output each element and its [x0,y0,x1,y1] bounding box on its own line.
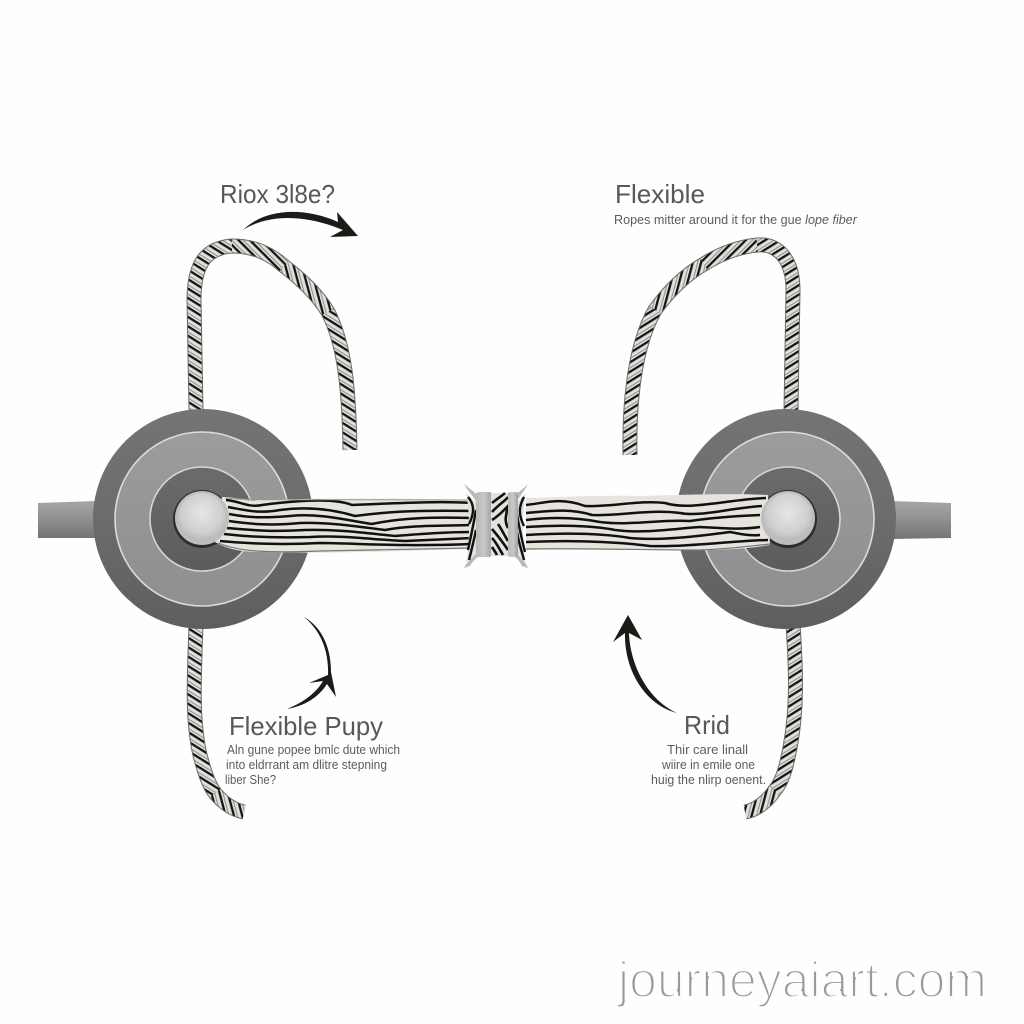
right knob [761,491,815,545]
text block: lower left [225,743,400,787]
watermark: journeyaiart.com [616,952,987,1008]
main rope: right section [526,494,770,550]
center collar [464,484,528,568]
text block: lower right: Thir care linall [667,743,748,757]
text block: lower left: into eldrrant am dlitre stepning [226,758,387,772]
right axle stub [892,501,951,539]
text block: lower right [651,743,766,787]
rope: bottom left tail [194,625,244,812]
arrow: lower left [287,617,336,709]
text block: lower left: liber She? [225,773,276,787]
heading: top right: Flexible [615,179,705,209]
left axle stub [38,501,96,538]
arrow: top left [243,212,358,237]
left knob [175,491,229,545]
rope: top right loop [630,245,793,455]
heading: lower left: Flexible Pupy [229,711,383,741]
arrow: lower right [613,615,677,713]
text block: lower left: Aln gune popee bmlc dute which [227,743,400,757]
heading: top left: Riox 3l8e? [220,179,335,209]
text block: lower right: wiire in emile one [661,758,755,772]
rope: bottom right tail [745,625,795,812]
text block: top right: Ropes mitter around it for the gue lope fiber [614,213,858,227]
main rope: left section [215,497,472,553]
heading: lower right: Rrid [684,710,730,740]
left pulley [93,409,313,629]
rope: top left loop [194,246,350,450]
right pulley [676,409,896,629]
text block: lower right: huig the nlirp oenent. [651,773,766,787]
